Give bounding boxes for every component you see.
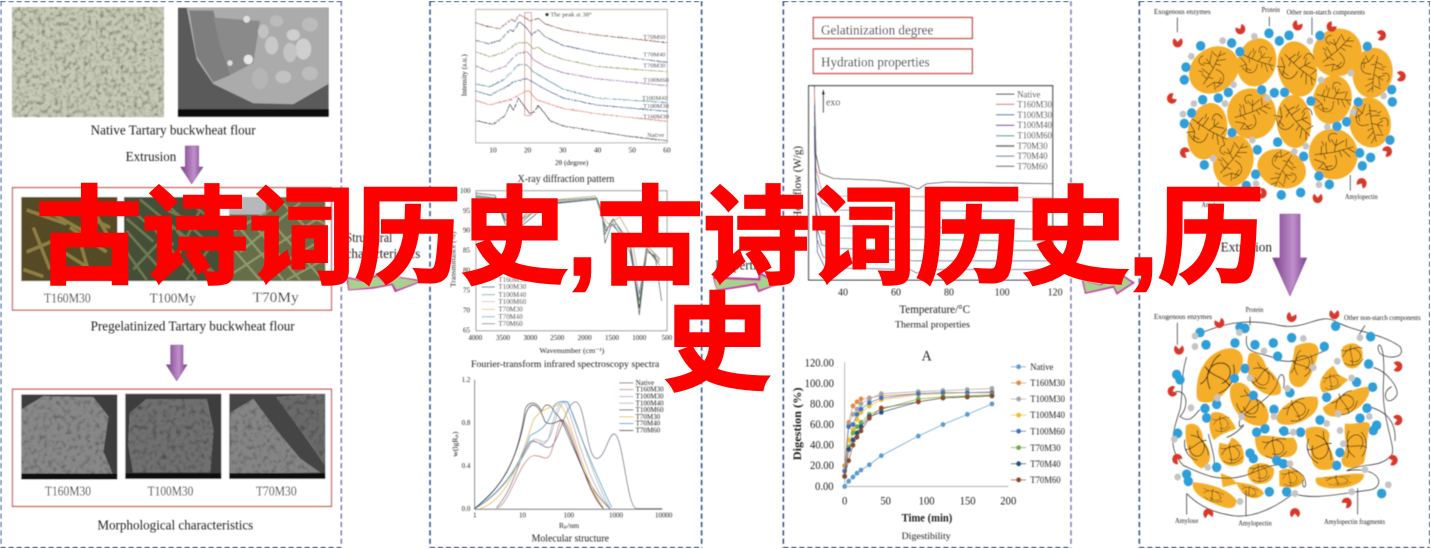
chart: digestibility [791,348,1065,525]
panel: raw material and morphology [1,1,422,548]
chart: molecular weight distribution: w(lgRₚ) [451,431,459,457]
chart: X-ray diffraction: 20 [524,145,532,155]
caption: morphological characteristics: Morphological characteristics [97,517,253,533]
chart: X-ray diffraction: T160M30 [643,113,669,120]
illustration: extruded starch fragments: Exogenous enzymes [1154,314,1212,321]
chart: X-ray diffraction: T70M40 [643,52,665,59]
illustration: extruded starch fragments: Other non-starch components [1344,315,1421,322]
chart: molecular weight distribution: Native [636,379,654,387]
chart: digestibility: T160M30 [1030,378,1065,388]
chart: molecular weight distribution: T70M40 [636,419,660,428]
chart: molecular weight distribution: 10000 [655,512,673,520]
label: extrusion: Extrusion [126,149,177,164]
illustration: extruded starch fragments: Amylopectin [1238,521,1272,528]
illustration: extruded starch fragments: Amylose [1175,518,1198,525]
chart: FTIR spectra: 100 [460,187,471,195]
box: gelatinization degree [813,18,972,39]
panel: morphology micrographs [12,389,331,506]
chart: X-ray diffraction: 40 [594,145,602,155]
illustration: native starch granules: Exogenous enzymes [1154,9,1211,16]
overlay headline: line two: 史 [664,285,770,404]
chart: FTIR spectra: T160M30 [498,276,527,284]
chart: digestibility: 120.00 [805,357,834,370]
chart: DSC thermal curves [791,86,1063,316]
chart: molecular weight distribution: T100M30 [636,393,664,401]
chart: DSC thermal curves: 100 [995,288,1010,299]
chart: digestibility: 100.00 [805,378,834,390]
caption: thermal properties: Thermal properties [895,319,970,331]
chart: FTIR spectra: Transmittance (%) [450,231,458,287]
chart: molecular weight distribution: T100M40 [636,399,664,407]
chart: DSC thermal curves: Native [1017,89,1040,99]
chart: DSC thermal curves: T70M40 [1017,151,1048,161]
chart: FTIR spectra: T100M30 [498,283,527,291]
chart: X-ray diffraction: 10 [489,145,497,155]
chart: X-ray diffraction: 2θ (degree) [555,158,589,167]
illustration: native starch granules [1154,7,1406,209]
chart: digestibility: T70M40 [1030,459,1061,469]
chart: digestibility: 50 [880,495,892,507]
chart: FTIR spectra: 95 [463,207,470,215]
label: structural characteristics: characteristics [346,246,420,261]
chart: FTIR spectra: 75 [463,286,470,295]
caption: molecular structure: Molecular structure [532,533,609,545]
chart: FTIR spectra [450,187,673,355]
chart: digestibility: 80.00 [810,399,834,411]
chart: digestibility: A [922,348,932,365]
caption: native flour: Native Tartary buckwheat flour [91,122,256,138]
caption: digestibility: Digestibility [902,531,951,542]
box: hydration properties [813,49,972,74]
chart: digestibility: 60.00 [810,419,834,431]
illustration: native starch granules: Amylose [1202,202,1223,209]
chart: digestibility: 20.00 [810,460,834,472]
chart: DSC thermal curves: Temperature/°C [899,303,970,316]
chart: FTIR spectra: 80 [463,267,470,275]
chart: X-ray diffraction: Native [647,132,664,139]
chart: molecular weight distribution: 0.8 [462,419,471,427]
chart: FTIR spectra: 90 [463,227,470,235]
chart: molecular weight distribution: 100 [564,512,575,520]
micrograph: T160M30 [21,394,117,480]
chart: DSC thermal curves: T160M30 [1017,99,1052,109]
box: hydration properties: Hydration properties [821,54,930,70]
chart: DSC thermal curves: T70M30 [1017,141,1048,151]
photo: T70My [229,197,325,281]
chart: DSC thermal curves: 120 [1048,288,1063,299]
chart: FTIR spectra: 2500 [550,334,565,342]
chart: molecular weight distribution: Rₚ/nm [559,522,579,530]
label: extrusion: Extrusion [1221,239,1272,254]
chart: DSC thermal curves: exo [826,98,840,109]
panel: structural characteristics [430,1,781,548]
photo: native flour [12,7,164,117]
chart: digestibility: 0.00 [815,481,834,493]
label: structural characteristics [346,230,420,261]
photo: starch granule micrograph [178,8,329,117]
chart: digestibility: 40.00 [810,439,834,452]
chart: molecular weight distribution: T160M30 [636,386,664,394]
chart: FTIR spectra: T70M60 [498,320,523,328]
chart: molecular weight distribution: 1 [473,512,477,520]
chart: X-ray diffraction [460,9,671,167]
label: T70M30: T70M30 [256,483,297,499]
illustration: extruded starch fragments [1154,307,1421,528]
chart: digestibility: 100 [919,495,935,507]
illustration: native starch granules: Other non-starch components [1287,10,1365,17]
chart: molecular weight distribution: 0.0 [462,505,471,513]
chart: FTIR spectra: T100M60 [498,298,527,306]
illustration: extruded starch fragments: Protein [1246,307,1264,314]
caption: FTIR spectra: Fourier-transform infrared spectroscopy spectra [471,359,660,370]
label: T100My: T100My [150,290,196,306]
label: T70My: T70My [253,290,300,306]
chart: digestibility: 0 [842,495,848,507]
chart: FTIR spectra: 70 [463,306,470,315]
chart: FTIR spectra: Wavenumber (cm⁻¹) [539,347,605,355]
chart: FTIR spectra: T70M40 [498,313,523,321]
chart: digestibility: T100M30 [1030,394,1065,404]
chart: DSC thermal curves: 40 [838,288,848,299]
chart: molecular weight distribution: 0.4 [462,462,471,470]
chart: digestibility: Time (min) [902,511,952,525]
label: T100M30: T100M30 [148,483,193,499]
arrow: extrusion [1273,214,1307,296]
chart: X-ray diffraction: Intensity (a.u.) [460,54,469,96]
label: properties: Properties [715,257,767,273]
chart: FTIR spectra: 65 [463,326,470,335]
chart: digestibility: Native [1030,362,1053,372]
chart: molecular weight distribution: T70M60 [636,426,660,435]
chart: FTIR spectra: 85 [463,247,470,255]
chart: molecular weight distribution [451,376,673,530]
chart: FTIR spectra: 1000 [632,334,647,342]
chart: FTIR spectra: 3500 [496,334,510,342]
chart: digestibility: T70M30 [1030,443,1061,453]
chart: X-ray diffraction: ■ The peak at 38° [545,11,592,18]
chart: X-ray diffraction: T100M60 [643,77,669,84]
chart: digestibility: 150 [960,495,976,507]
arrow: to morphology [166,345,187,381]
photo: T100My [124,197,220,281]
label: structural characteristics: Structural [346,230,393,245]
caption: X-ray diffraction pattern: X-ray diffraction pattern [518,174,614,185]
caption: pregelatinized flour: Pregelatinized Tartary buckwheat flour [91,318,295,334]
chart: X-ray diffraction: T70M60 [643,34,665,41]
micrograph: T70M30 [229,394,325,479]
arrow: to properties panel [713,271,781,292]
arrow: to structure panel [346,271,422,292]
chart: X-ray diffraction: T100M40 [642,95,667,102]
chart: molecular weight distribution: 10 [519,512,526,520]
chart: FTIR spectra: 3000 [523,334,538,342]
label: T160M30: T160M30 [45,483,91,499]
chart: molecular weight distribution: 1000 [609,512,623,520]
chart: X-ray diffraction: 50 [629,145,636,155]
chart: DSC thermal curves: T100M40 [1017,120,1052,130]
chart: digestibility: T70M60 [1030,475,1061,485]
chart: FTIR spectra: T70M30 [498,305,523,314]
chart: FTIR spectra: 500 [662,334,673,342]
panel: pregelatinized samples [12,188,331,310]
panel: starch structure before and after extrusion [1082,1,1430,548]
box: gelatinization degree: Gelatinization degree [821,22,934,37]
chart: X-ray diffraction: T70M30 [643,62,665,70]
chart: molecular weight distribution: 1.2 [462,376,471,384]
chart: digestibility: 200 [1000,495,1017,507]
chart: DSC thermal curves: Heat flow (W/g) [791,146,804,219]
chart: FTIR spectra: 4000 [468,334,483,342]
chart: X-ray diffraction: 30 [559,145,567,155]
overlay headline: line one: 古诗词历史,古诗词历史,历 [36,178,1264,298]
arrow: extrusion down [181,146,203,184]
photo: T160M30 [21,197,117,281]
chart: FTIR spectra: 1500 [605,334,619,342]
chart: DSC thermal curves: T100M30 [1017,110,1052,120]
illustration: native starch granules: Protein [1262,7,1281,14]
chart: digestibility: T100M40 [1030,410,1065,420]
chart: FTIR spectra: T100M40 [498,291,527,299]
chart: X-ray diffraction: 60 [663,145,671,155]
illustration: native starch granules: Amylopectin [1345,194,1378,201]
chart: molecular weight distribution: T100M60 [636,406,664,414]
chart: digestibility: Digestion (%) [791,387,804,460]
chart: DSC thermal curves: T100M60 [1017,130,1052,141]
micrograph: T100M30 [125,394,221,479]
illustration: extruded starch fragments: Amylopectin fragments [1324,519,1385,526]
chart: DSC thermal curves: 60 [891,288,901,299]
panel: properties [783,1,1071,548]
chart: digestibility: T100M60 [1030,426,1065,436]
chart: DSC thermal curves: T70M60 [1017,161,1048,171]
arrow: to starch panel [1082,273,1135,295]
chart: X-ray diffraction: T100M30 [643,103,669,110]
label: T160M30: T160M30 [44,290,91,306]
chart: molecular weight distribution: T70M30 [636,413,660,421]
chart: FTIR spectra: 2000 [578,334,592,342]
chart: DSC thermal curves: 80 [944,288,954,299]
